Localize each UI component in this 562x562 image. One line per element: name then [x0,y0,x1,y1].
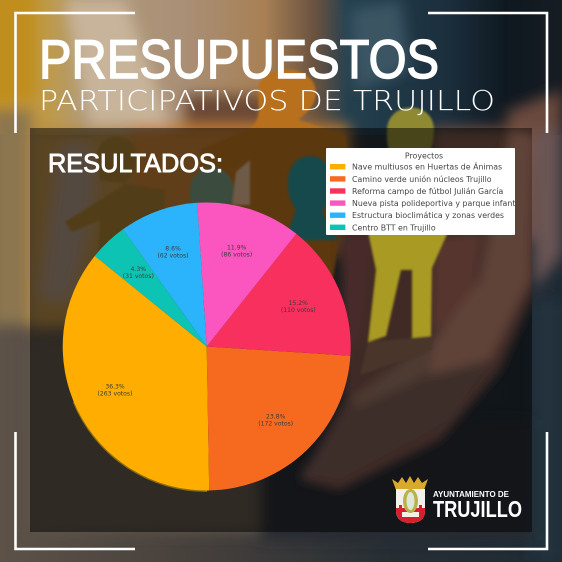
logo: Ayuntamiento de Trujillo: TRUJILLO [433,496,522,522]
slice labels: (110 votos) [281,307,316,314]
slice labels: (31 votos) [123,273,154,280]
slice: Nueva pista [197,202,296,346]
title: PRESUPUESTOS [39,28,439,90]
icon: crown [392,476,428,490]
light wedge [232,160,250,205]
icon: shield [396,489,425,523]
hands and paper figures inside the panel [190,130,540,490]
yellow figure body [368,232,448,342]
teal paper figures [190,168,234,210]
slice labels: 8.6% [165,246,181,253]
legend: Camino verde unión núcleos Trujillo [352,174,492,184]
frame corner: bottom left [16,432,135,549]
slice labels: (263 votos) [98,390,132,398]
slice: Estructura [123,203,207,346]
right hand [300,235,532,493]
results heading: RESULTADOS: [48,148,223,178]
frame corner: bottom right [428,432,547,549]
legend: Centro BTT en Trujillo [352,223,436,232]
legend: Reforma campo de fútbol Julián García [352,187,503,196]
slice labels [98,244,316,427]
yellow figure head [387,108,434,170]
slice: Camino verde [207,346,350,490]
frame corner: top right [428,13,547,133]
slice: Nave multiusos [63,256,209,491]
slice labels: (62 votos) [157,252,189,260]
frame corner: top left [16,13,135,133]
pie chart [63,202,351,491]
legend title: Proyectos [405,151,443,160]
olive figure on the left [65,136,165,300]
legend: Nueva pista polideportiva y parque infantil [352,199,520,208]
orange paper figure [200,70,350,300]
slice labels: 15.2% [289,300,308,307]
legend: Nave multiusos en Huertas de Ánimas [352,161,502,172]
logo text: AYUNTAMIENTO DE [433,489,509,499]
slice labels: 4.3% [131,266,146,273]
slice labels: (172 votos) [258,420,293,427]
pie shadow edge [74,402,207,491]
slice labels: 11.9% [227,244,247,252]
dark results panel [30,128,532,532]
legend [326,148,520,235]
slice labels: (86 votos) [221,251,252,258]
legend: Estructura bioclimática y zonas verdes [352,211,504,220]
slice labels: 36.3% [105,384,125,391]
logo: Ayuntamiento de Trujillo [392,476,522,523]
slice: Reforma campo [207,234,351,356]
slice: Centro BTT [95,229,207,346]
subtitle: PARTICIPATIVOS DE TRUJILLO [39,84,495,117]
slice labels: 23.8% [266,414,286,420]
